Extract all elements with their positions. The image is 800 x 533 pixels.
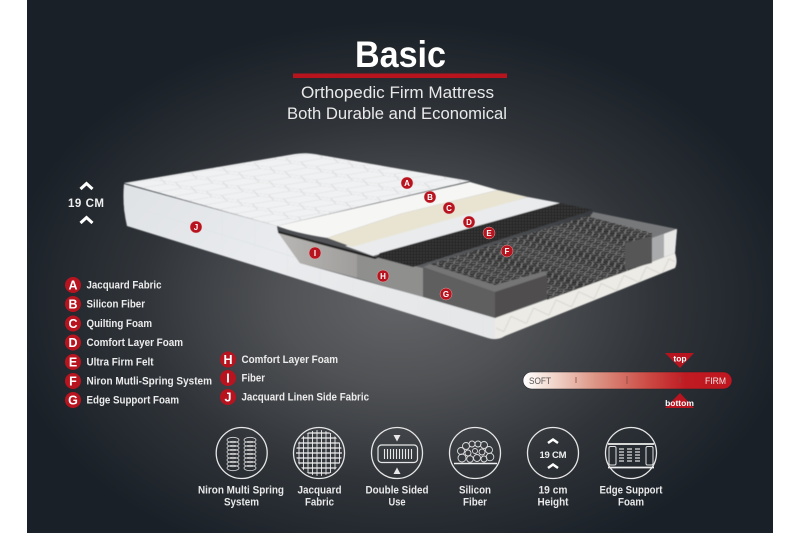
marker letters: B — [427, 193, 433, 202]
legend: right column — [220, 352, 369, 405]
marker letters: D — [466, 218, 472, 227]
legend: left column: Silicon Fiber — [86, 299, 146, 311]
bottom marker — [665, 393, 694, 408]
back support foam — [625, 236, 652, 270]
legend: left column: A — [68, 278, 78, 292]
legend: right column: Fiber — [242, 373, 266, 385]
legend: left column: E — [69, 356, 77, 370]
firmness scale — [523, 353, 732, 408]
top marker: top — [673, 354, 687, 364]
height indicator — [68, 184, 104, 223]
top marker — [665, 353, 694, 368]
bottom fabric quilting — [495, 253, 675, 338]
marker letters — [194, 179, 510, 299]
legend: left column: Comfort Layer Foam — [86, 337, 183, 349]
feature labels: 19 cm — [538, 484, 568, 496]
marker letters: J — [194, 223, 198, 232]
layer D white foam — [345, 197, 560, 256]
bottom marker: bottom — [665, 398, 694, 408]
foam side I — [278, 232, 357, 278]
feature labels: Niron Multi Spring — [198, 484, 284, 496]
layer C cream foam — [327, 190, 528, 247]
top quilted fabric A — [124, 153, 470, 226]
legend: left column: D — [68, 336, 78, 350]
legend: left column: C — [68, 317, 78, 331]
subtitle: Orthopedic Firm Mattress — [301, 83, 494, 102]
legend: right column: Comfort Layer Foam — [242, 354, 338, 366]
thin dark edge — [278, 231, 378, 259]
feature labels: Fabric — [305, 496, 334, 508]
feature labels — [198, 484, 663, 508]
marker letters: E — [486, 229, 492, 238]
legend: left column: Niron Mutli-Spring System — [86, 376, 212, 388]
mattress markers — [190, 177, 513, 300]
edge support foam G — [423, 264, 547, 318]
subtitle: Both Durable and Economical — [287, 104, 507, 123]
legend: left column — [65, 277, 212, 408]
feature labels: Silicon — [459, 484, 491, 496]
marker letters: A — [404, 179, 410, 188]
firmness scale: SOFT — [529, 376, 551, 387]
bottom fabric edge — [380, 253, 676, 339]
spring core F — [425, 214, 652, 300]
legend: right column: J — [225, 390, 232, 404]
legend: left column: Edge Support Foam — [86, 394, 179, 406]
legend: right column: I — [226, 372, 230, 386]
layer E felt — [376, 203, 593, 267]
marker letters: G — [443, 290, 449, 299]
foam side H — [357, 253, 423, 297]
mattress illustration — [123, 153, 677, 339]
icon: spring system — [216, 428, 267, 478]
firmness scale: FIRM — [705, 376, 726, 387]
title: Basic — [355, 34, 446, 75]
layer B silicon fiber — [277, 182, 498, 238]
title underline — [293, 74, 507, 78]
legend: left column: Jacquard Fabric — [86, 280, 162, 292]
feature labels: Height — [538, 496, 569, 508]
legend: left column: Ultra Firm Felt — [86, 356, 154, 368]
side panel J — [123, 184, 495, 339]
marker letters: C — [446, 204, 452, 213]
legend: left column: F — [69, 374, 77, 388]
icon: double sided — [372, 428, 422, 478]
marker letters: H — [380, 272, 386, 281]
back frame top — [590, 212, 677, 239]
marker letters: I — [314, 249, 316, 258]
legend: left column: B — [68, 298, 78, 312]
legend: right column: Jacquard Linen Side Fabric — [242, 392, 369, 404]
right side wall highlight — [664, 229, 677, 257]
marker letters: F — [505, 247, 510, 256]
feature labels: Double Sided — [366, 484, 428, 496]
icon: edge support foam — [606, 428, 656, 478]
legend: left column: Quilting Foam — [86, 318, 152, 330]
feature labels: Fiber — [463, 496, 488, 508]
height indicator: 19 CM — [68, 198, 104, 210]
icon: 19 cm height — [528, 428, 578, 478]
feature labels: Foam — [618, 496, 644, 508]
icon: jacquard fabric — [294, 428, 344, 478]
legend: left column: G — [68, 394, 78, 408]
right side wall — [652, 229, 677, 262]
legend: right column: H — [223, 353, 233, 367]
icon: 19 cm height: 19 CM — [540, 450, 567, 461]
feature labels: Edge Support — [600, 484, 663, 496]
feature labels: System — [224, 496, 259, 508]
icon: silicon fiber — [450, 428, 500, 478]
feature labels: Jacquard — [298, 484, 342, 496]
subtitle — [287, 83, 507, 123]
feature labels: Use — [388, 496, 406, 508]
